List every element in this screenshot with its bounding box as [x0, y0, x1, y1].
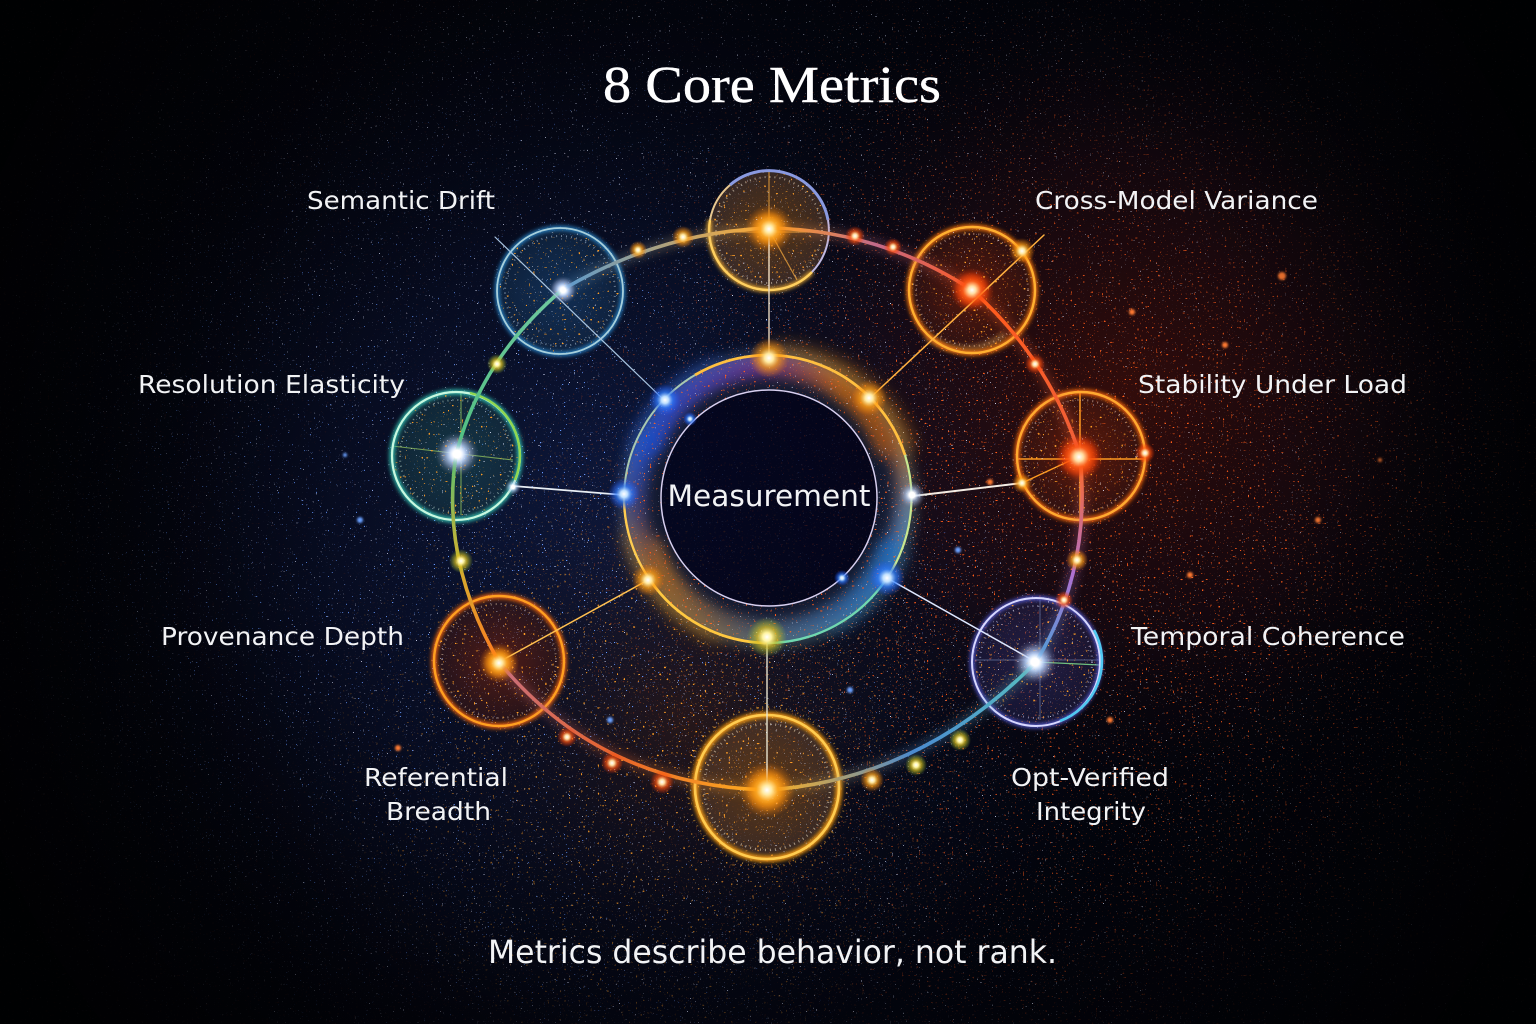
node core stars [439, 211, 1099, 812]
label: Provenance Depth: Provenance Depth [161, 622, 404, 651]
label: Opt-Verified Integrity [1011, 763, 1169, 826]
node: top (gold) [709, 170, 829, 290]
orbit beads [449, 226, 1155, 794]
footer tagline: Metrics describe behavior, not rank. [488, 933, 1057, 971]
node: Resolution Elasticity (green-teal) [392, 392, 520, 520]
title: 8 Core Metrics [603, 57, 941, 114]
node: Provenance Depth (orange) [434, 596, 564, 726]
label: Semantic Drift: Semantic Drift [307, 186, 495, 215]
label: Referential Breadth [364, 763, 508, 826]
label: Opt-Verified Integrity: Opt-Verified [1011, 763, 1169, 792]
orbit ring [453, 228, 1082, 790]
node: Temporal Coherence (violet-blue) [972, 598, 1102, 726]
node: Stability Under Load (orange-red) [1017, 392, 1146, 520]
label: Cross-Model Variance: Cross-Model Variance [1035, 186, 1318, 215]
connector spokes from hub to metric nodes [495, 230, 1044, 790]
label: Stability Under Load: Stability Under Load [1138, 370, 1407, 399]
label: Opt-Verified Integrity: Integrity [1036, 797, 1146, 826]
label: Temporal Coherence: Temporal Coherence [1130, 622, 1405, 651]
label: Referential Breadth: Referential [364, 763, 508, 792]
hub: Measurement ring [608, 338, 925, 657]
node: Cross-Model Variance (orange-red) [909, 227, 1035, 353]
node: Opt-Verified Integrity (gold) [687, 707, 847, 867]
label: Referential Breadth: Breadth [386, 797, 491, 826]
node star speckle [380, 160, 1160, 870]
hub label: Measurement [668, 479, 870, 513]
label: Resolution Elasticity: Resolution Elasticity [138, 370, 405, 399]
orbit ring: glow [499, 228, 1082, 790]
node: Semantic Drift (blue) [497, 228, 623, 354]
